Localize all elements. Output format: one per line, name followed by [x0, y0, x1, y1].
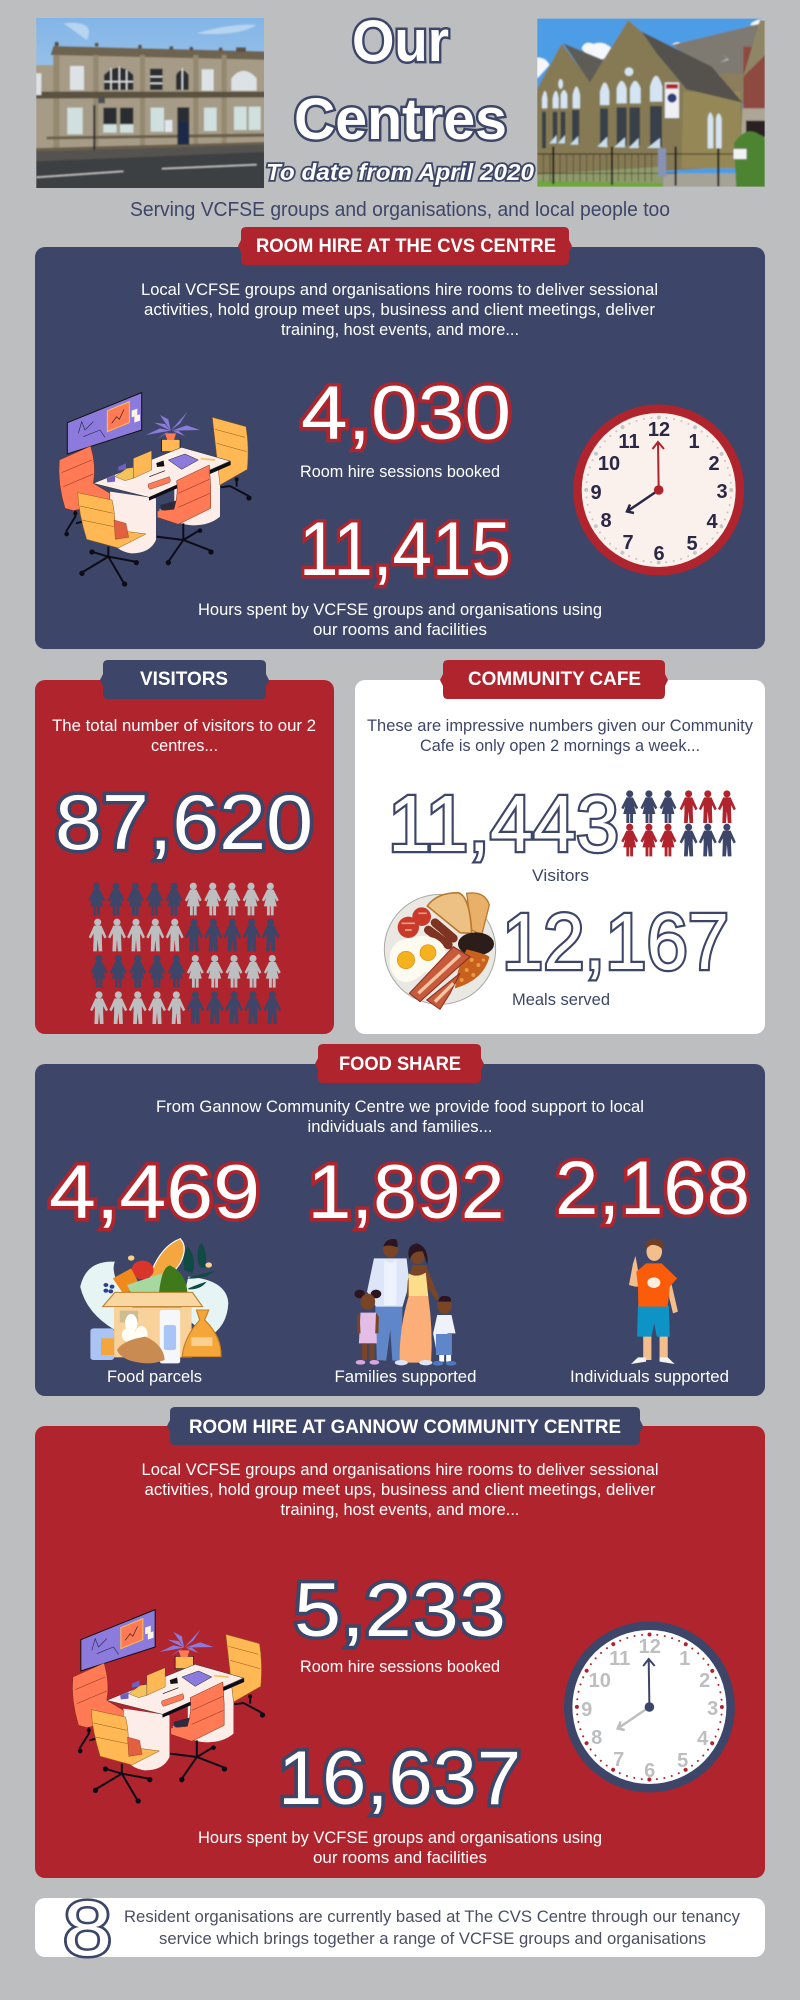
stat: 4,469 food parcels: 4,469: [49, 1150, 260, 1235]
stat: 1,892 families: Families supported: [334, 1368, 476, 1386]
stat: 1,892 families: [308, 1150, 504, 1386]
stat: 16,637 hours: Hours spent by VCFSE groups and organisations using: [198, 1829, 602, 1847]
illustration: family: [354, 1239, 456, 1366]
badge: room hire Gannow: ROOM HIRE AT GANNOW COMMUNITY CENTRE: [189, 1416, 621, 1438]
illustration: person: [629, 1239, 678, 1364]
panel: room hire at the CVS Centre: [35, 227, 765, 649]
illustration: meeting desk: [59, 393, 252, 587]
intro text: activities, hold group meet ups, business and client meetings, deliver: [144, 301, 656, 319]
icon: clock CVS: 8: [600, 510, 612, 532]
stat: 12,167 meals: 12,167: [502, 897, 729, 986]
panel: room hire at Gannow Community Centre: [35, 1407, 765, 1878]
badge: room hire CVS: ROOM HIRE AT THE CVS CENTRE: [256, 235, 556, 257]
illustration: cooked breakfast plate: [384, 893, 496, 1009]
icon: clock Gannow: 4: [697, 1728, 709, 1750]
stat: 4,469 food parcels: [49, 1150, 260, 1386]
intro text: [142, 1461, 658, 1519]
subtitle: date range: To date from April 2020: [266, 159, 534, 185]
icon: clock Gannow: 3: [707, 1698, 718, 1720]
icon: clock Gannow: 12: [639, 1636, 661, 1658]
stat: 11,443 visitors: Visitors: [532, 867, 589, 885]
intro text: [156, 1098, 644, 1136]
icon: clock CVS: 9: [590, 482, 602, 504]
stat: 2,168 individuals: [555, 1146, 750, 1386]
intro text: Local VCFSE groups and organisations hire rooms to deliver sessional: [142, 1461, 658, 1479]
title: [294, 9, 507, 152]
intro text: [367, 717, 754, 755]
icon: clock Gannow: 11: [609, 1648, 630, 1670]
title: Our: [352, 9, 449, 74]
icon: clock CVS: 7: [622, 532, 634, 554]
callout text: [124, 1908, 741, 1948]
stat: 4,030 sessions: [300, 371, 511, 481]
stat: 1,892 families: 1,892: [308, 1150, 504, 1235]
stat: 87,620 visitors: 87,620: [55, 778, 313, 866]
stat: 16,637 hours: [198, 1736, 602, 1867]
icon: clock CVS: 2: [708, 453, 720, 475]
intro text: [52, 717, 316, 755]
icon: clock Gannow: 10: [589, 1670, 611, 1692]
callout: resident organisations: [35, 1884, 765, 1972]
tagline: Serving VCFSE groups and organisations, and local people too: [130, 199, 670, 221]
callout text: Resident organisations are currently based at The CVS Centre through our tenancy: [124, 1908, 741, 1926]
photo: Gannow Community Centre building: [537, 18, 765, 187]
icon: clock Gannow: 5: [677, 1750, 688, 1772]
intro text: individuals and families...: [308, 1118, 492, 1136]
panel: food share: [35, 1044, 765, 1396]
title: Centres: [294, 87, 507, 152]
badge: food share: [315, 1044, 484, 1083]
stat: 5,233 sessions: Room hire sessions booked: [300, 1658, 500, 1676]
stat: 16,637 hours: our rooms and facilities: [313, 1849, 487, 1867]
icon: clock Gannow: 8: [591, 1727, 602, 1749]
icon: clock CVS: 1: [688, 431, 700, 453]
badge: room hire CVS: [238, 227, 572, 265]
badge: food share: FOOD SHARE: [339, 1053, 461, 1075]
badge: community cafe: COMMUNITY CAFE: [468, 668, 641, 690]
intro text: The total number of visitors to our 2: [52, 717, 316, 735]
illustration: food parcel: [80, 1239, 228, 1363]
icon: clock CVS: 10: [598, 453, 620, 475]
icon: clock Gannow: 2: [699, 1670, 710, 1692]
icon: clock CVS: 5: [686, 533, 698, 555]
callout text: service which brings together a range of VCFSE groups and organisations: [159, 1930, 706, 1948]
stat: 4,030 sessions: Room hire sessions booked: [300, 463, 500, 481]
stat: 11,415 hours: our rooms and facilities: [313, 621, 487, 639]
icon: clock CVS: 3: [716, 481, 728, 503]
badge: visitors: [100, 660, 269, 699]
icon: clock CVS: 11: [618, 431, 640, 453]
pictogram: cafe visitors: [622, 791, 735, 856]
panel: community cafe: [355, 660, 765, 1034]
stat: 4,469 food parcels: Food parcels: [107, 1368, 202, 1386]
stat: 11,443 visitors: 11,443: [388, 779, 619, 868]
illustration: meeting desk: [72, 1610, 265, 1804]
icon: clock CVS: 6: [653, 543, 665, 565]
intro text: Local VCFSE groups and organisations hire rooms to deliver sessional: [141, 281, 658, 299]
stat: 4,030 sessions: 4,030: [301, 371, 511, 456]
photo: The CVS Centre building: [36, 18, 264, 188]
stat: 11,415 hours: Hours spent by VCFSE groups and organisations using: [198, 601, 602, 619]
icon: clock CVS: 4: [706, 511, 718, 533]
icon: clock Gannow: 1: [679, 1648, 690, 1670]
number 8: 8: [63, 1884, 112, 1972]
stat: 11,415 hours: 11,415: [299, 507, 511, 592]
panel: visitors: [35, 660, 334, 1034]
intro text: These are impressive numbers given our Community: [367, 717, 754, 735]
icon: clock CVS: 12: [648, 419, 670, 441]
icon: clock Gannow: [564, 1622, 735, 1792]
stat: 16,637 hours: 16,637: [278, 1736, 521, 1821]
intro text: [141, 281, 658, 339]
icon: clock CVS: [573, 404, 744, 576]
icon: clock Gannow: 9: [581, 1699, 592, 1721]
stat: 2,168 individuals: 2,168: [555, 1146, 750, 1231]
badge: visitors: VISITORS: [140, 668, 228, 690]
intro text: training, host events, and more...: [281, 321, 519, 339]
intro text: From Gannow Community Centre we provide food support to local: [156, 1098, 644, 1116]
icon: clock Gannow: 6: [644, 1760, 655, 1782]
badge: community cafe: [440, 660, 668, 699]
stat: 5,233 sessions: 5,233: [294, 1568, 506, 1653]
pictogram grid of people: [89, 883, 281, 1024]
intro text: training, host events, and more...: [280, 1501, 520, 1519]
stat: 2,168 individuals: Individuals supported: [570, 1368, 729, 1386]
intro text: centres...: [151, 737, 218, 755]
badge: room hire Gannow: [167, 1407, 643, 1445]
intro text: Cafe is only open 2 mornings a week...: [420, 737, 700, 755]
stat: 12,167 meals: Meals served: [512, 991, 610, 1009]
icon: clock Gannow: 7: [613, 1749, 624, 1771]
stat: 11,415 hours: [198, 507, 602, 639]
intro text: activities, hold group meet ups, business and client meetings, deliver: [144, 1481, 656, 1499]
